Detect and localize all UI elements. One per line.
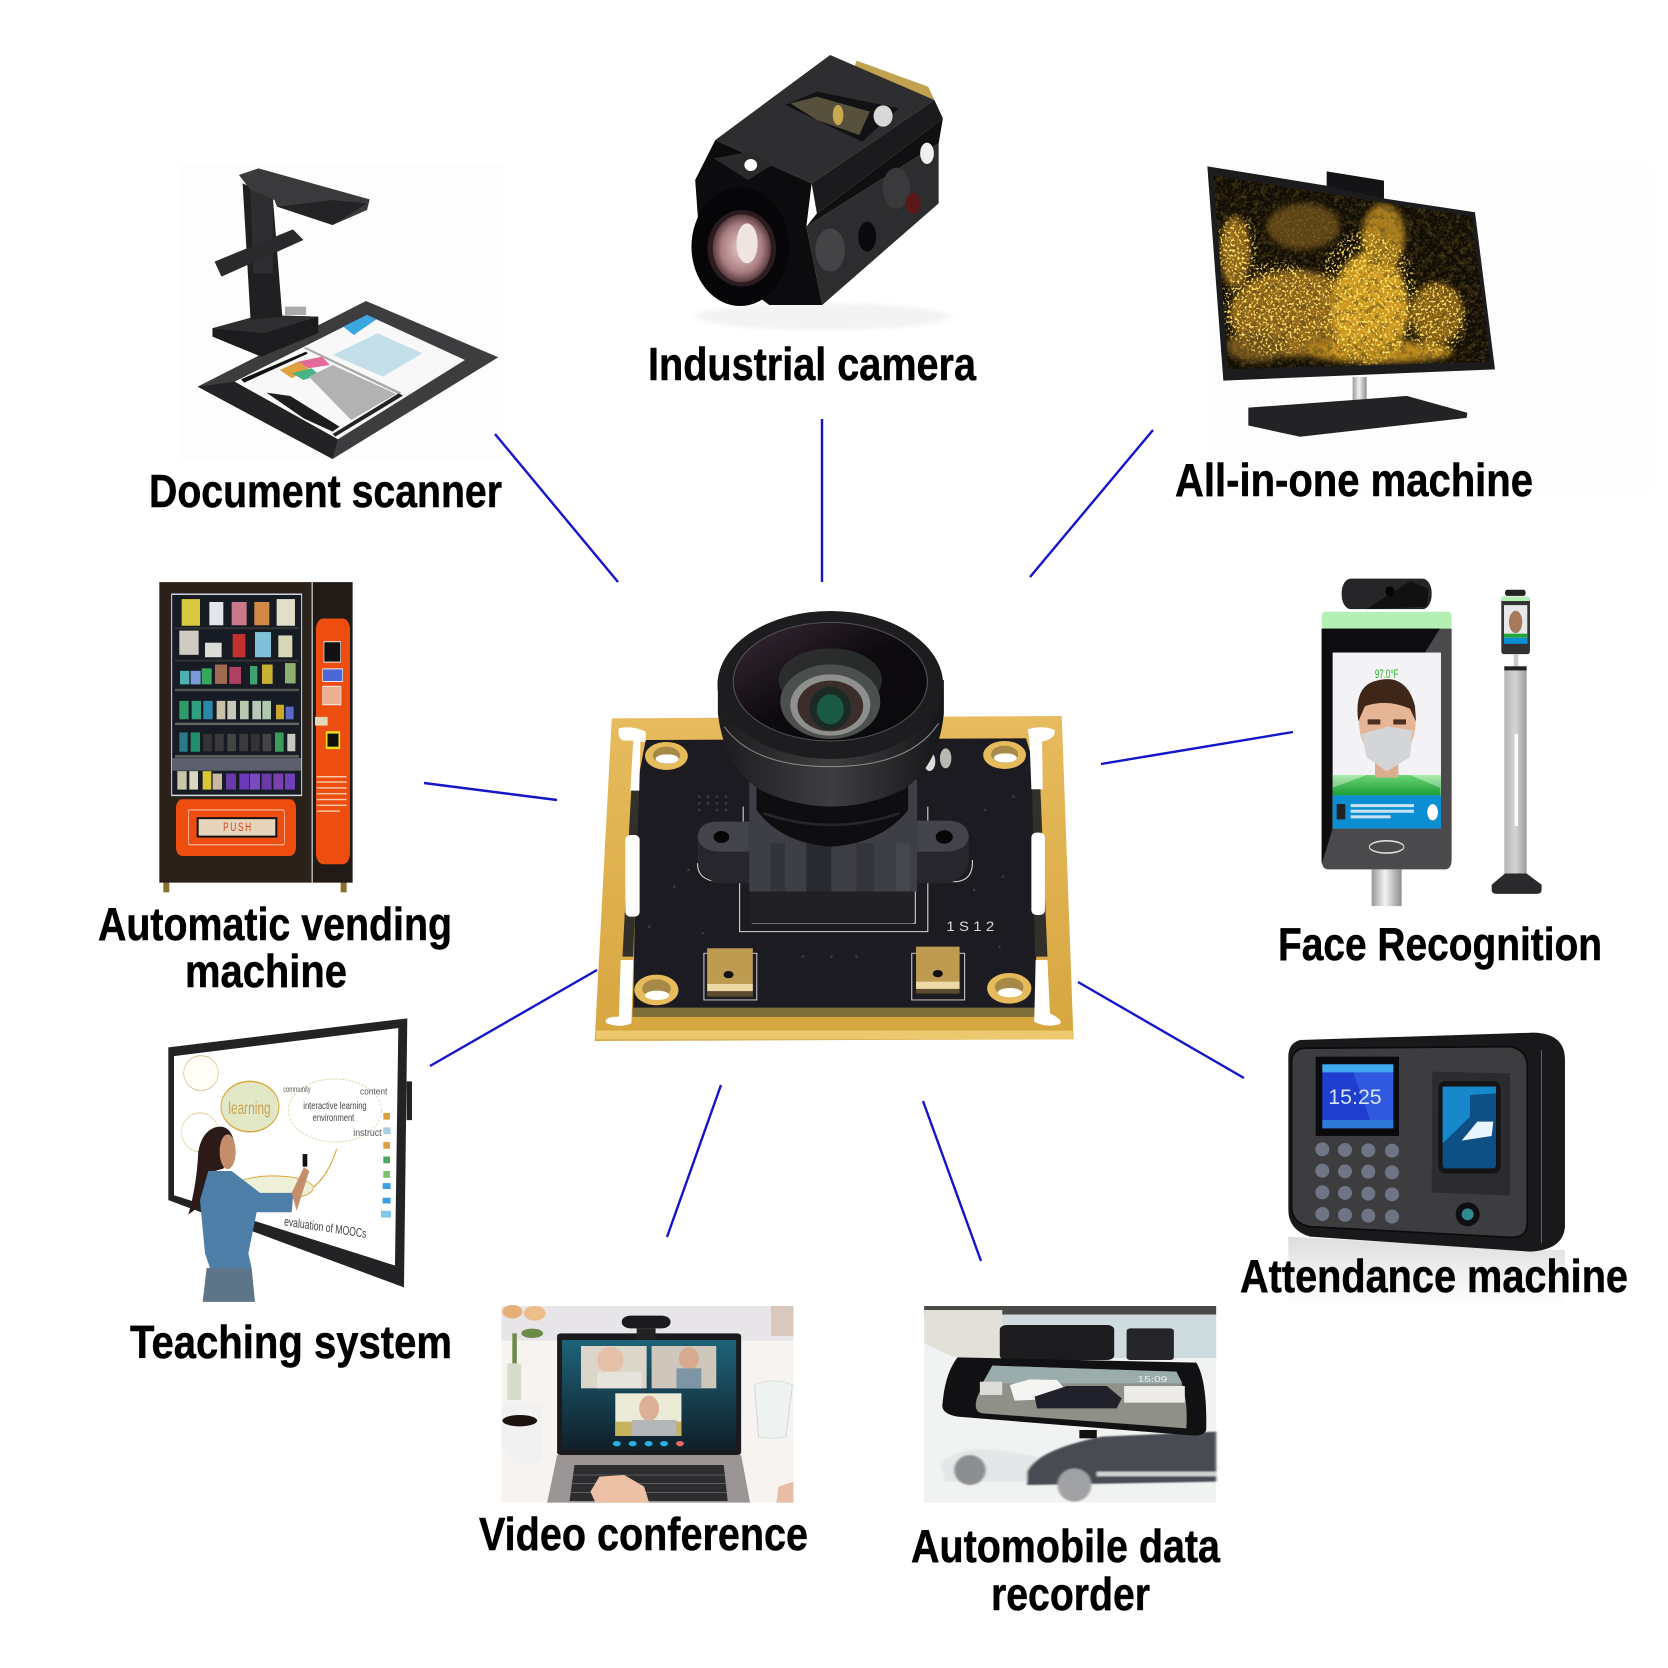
connector: video conference	[667, 1085, 721, 1237]
connector: industrial camera	[821, 419, 823, 582]
connector lines	[424, 419, 1293, 1261]
icon: video conference	[501, 1305, 793, 1503]
rear car reflection	[940, 1432, 1216, 1502]
push label: PUSH	[223, 821, 253, 834]
gold circuit board	[595, 716, 1074, 1041]
whiteboard word: environment: environment	[313, 1112, 355, 1123]
forehead temperature reading: 97.0°F	[1375, 669, 1398, 682]
heading: Automobile data recorder: recorder	[991, 1568, 1150, 1620]
mirror clock reading: 15:09	[1138, 1376, 1168, 1384]
heading: Industrial camera: Industrial camera	[648, 338, 976, 390]
heading: Automatic vending machine: machine	[185, 945, 347, 997]
heading: All-in-one machine: All-in-one machine	[1175, 454, 1533, 506]
icon: USB camera module	[595, 611, 1074, 1041]
icon: document scanner	[179, 163, 505, 460]
black PCB area	[633, 738, 1040, 1008]
connector: teaching system	[430, 970, 597, 1066]
heading: Teaching system: Teaching system	[130, 1316, 452, 1368]
icon: vending machine	[159, 582, 353, 892]
whiteboard word: instruct: instruct	[353, 1127, 382, 1138]
lens barrel	[717, 611, 944, 847]
heading: Automatic vending machine: Automatic vending	[98, 898, 452, 950]
heading: Automatic vending machine	[98, 898, 452, 997]
whiteboard word: learning: learning	[228, 1099, 271, 1118]
icon: teaching system smart board	[168, 1018, 412, 1302]
heading: Face Recognition: Face Recognition	[1278, 918, 1602, 970]
connector: attendance machine	[1078, 982, 1244, 1078]
whiteboard word: community: community	[283, 1086, 311, 1094]
heading: Video conference: Video conference	[479, 1508, 808, 1560]
connector: document scanner	[495, 434, 618, 582]
heading: Automobile data recorder: Automobile data	[911, 1520, 1220, 1572]
connector: vending machine	[424, 783, 557, 800]
whiteboard word: content: content	[360, 1086, 388, 1097]
whiteboard phrase: interactive learning: interactive learning	[303, 1100, 367, 1111]
left microphone	[704, 948, 757, 1000]
heading: Automobile data recorder	[911, 1520, 1220, 1620]
right microphone	[912, 947, 965, 1000]
connector: face recognition	[1101, 732, 1293, 764]
icon: face recognition terminal	[1322, 579, 1542, 906]
lens holder	[697, 780, 969, 923]
icon: automobile data recorder	[924, 1306, 1216, 1503]
heading: Document scanner: Document scanner	[149, 465, 502, 517]
icon: all-in-one machine	[1207, 166, 1495, 437]
connector: automobile data recorder	[923, 1101, 981, 1261]
clock time on LCD: 15:25	[1328, 1085, 1382, 1109]
icon: attendance machine	[1288, 1033, 1565, 1307]
teacher figure	[188, 1127, 309, 1302]
silkscreen marking: 1S12	[946, 919, 999, 935]
whiteboard phrase: evaluation of MOOCs: evaluation of MOOCs	[284, 1215, 367, 1241]
connector: all-in-one machine	[1030, 430, 1153, 577]
icon: industrial camera	[691, 55, 949, 330]
